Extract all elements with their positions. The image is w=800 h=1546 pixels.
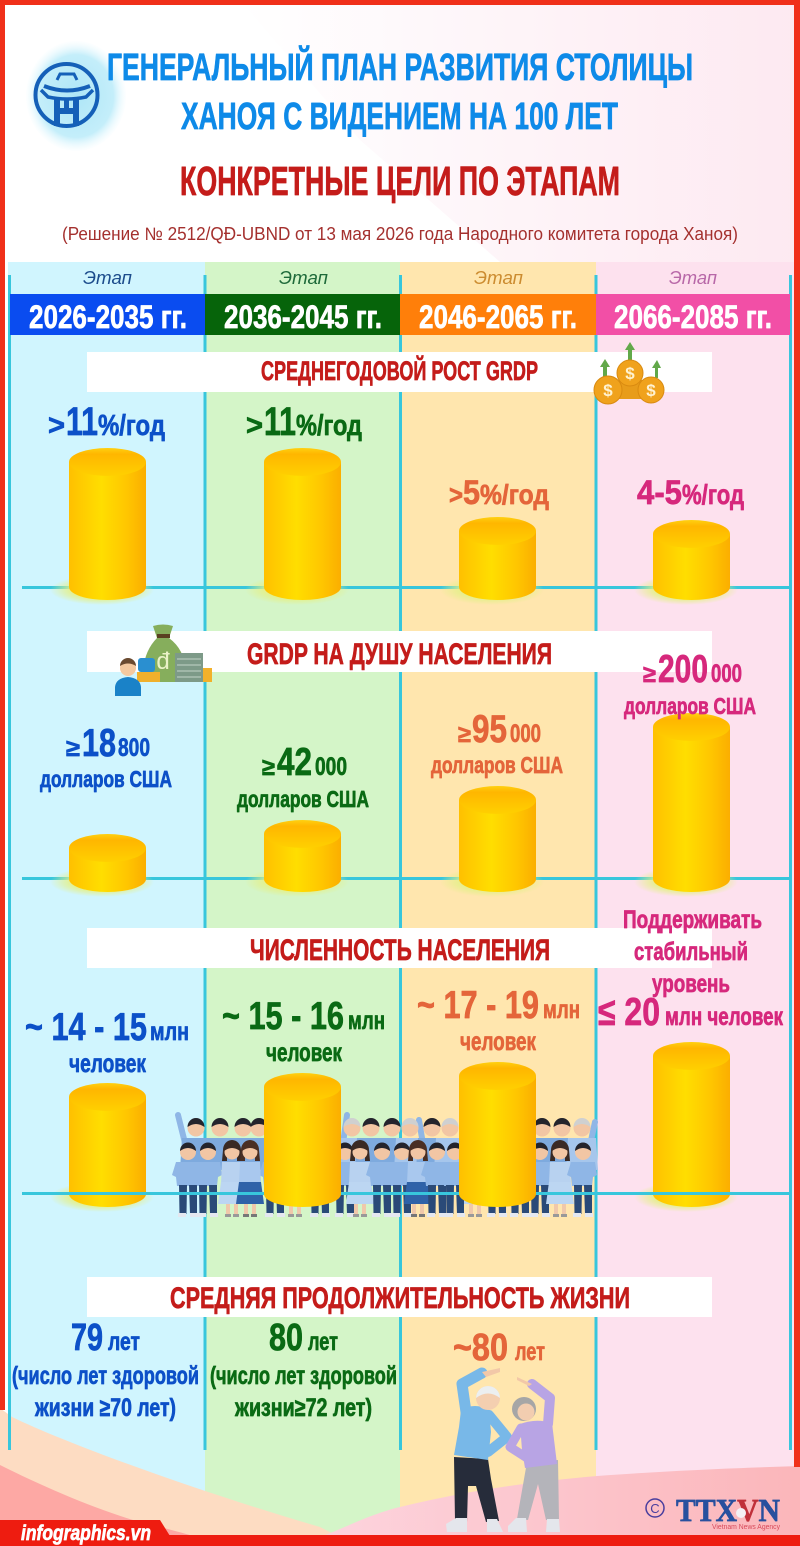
value: column 3 life expectancy: ~80 (453, 1327, 508, 1369)
value: column 1 life expectancy: жизни ≥70 лет) (34, 1394, 176, 1422)
value: column 4 per capita: 200 (658, 648, 708, 691)
value: column 2 life expectancy: лет (308, 1328, 338, 1356)
logo: TTXVN: C (650, 1501, 660, 1516)
grid line: population baseline (22, 1192, 790, 1195)
GRDP growth values (48, 400, 744, 512)
logo: TTXVN: TTXVN (676, 1492, 780, 1528)
value: column 1 per capita: 800 (118, 734, 150, 762)
stage year bars: 2026-2035 гг. (29, 299, 187, 335)
value: column 1 per capita: ≥ (66, 735, 80, 762)
section: population heading: ЧИСЛЕННОСТЬ НАСЕЛЕНИЯ (250, 934, 550, 967)
value: column 3 growth: 5 (463, 474, 480, 512)
stage year bars (10, 294, 790, 335)
section: population heading (87, 928, 712, 968)
value: column 4 growth: %/год (682, 479, 744, 510)
chart: GRDP per capita cylinders (50, 713, 738, 897)
value: column 2 per capita: 42 (277, 741, 312, 784)
value: column 2 population (222, 995, 385, 1067)
value: column 4 population (598, 906, 783, 1034)
value: column 4 population: стабильный (634, 938, 748, 966)
footer waves (0, 1408, 800, 1546)
stage year bars: 2046-2065 гг. (419, 299, 577, 335)
value: column 2 growth: 11 (264, 400, 296, 444)
title: ХАНОЯ С ВИДЕНИЕМ НА 100 ЛЕТ (181, 96, 618, 138)
value: column 1 population (25, 1006, 189, 1078)
decision reference: (Решение № 2512/QĐ-UBND от 13 мая 2026 года Народного комитета города Ханоя) (62, 224, 738, 244)
stage labels: Этап (83, 268, 132, 288)
value: column 4 growth (637, 474, 744, 512)
section: life expectancy heading (87, 1277, 712, 1317)
life expectancy values (12, 1317, 545, 1422)
value: column 4 per capita (624, 648, 756, 719)
man (446, 1368, 507, 1532)
value: column 4 population: уровень (652, 970, 730, 998)
chart: GRDP growth cylinders (50, 448, 738, 605)
value: column 2 population: человек (266, 1037, 343, 1067)
value: column 3 per capita: 000 (510, 720, 541, 748)
value: column 1 growth (48, 400, 165, 444)
icon: coins with arrows (594, 342, 664, 404)
value: column 3 growth (449, 474, 549, 512)
stage labels: Этап (474, 268, 523, 288)
value: column 1 per capita: 18 (82, 722, 116, 765)
section: GRDP per capita heading (87, 631, 712, 672)
value: column 3 population: млн (543, 996, 580, 1024)
value: column 3 per capita: 95 (472, 708, 507, 751)
value: column 3 population (417, 984, 580, 1056)
value: column 2 per capita (237, 741, 369, 812)
icon: coins with arrows: $ (625, 364, 635, 383)
value: column 4 per capita: ≥ (643, 661, 656, 688)
stage labels: Этап (279, 268, 328, 288)
value: column 3 per capita (431, 708, 563, 778)
value: column 2 growth: %/год (296, 410, 362, 442)
value: column 1 per capita (40, 722, 172, 792)
icon: coins with arrows: $ (603, 381, 613, 400)
value: column 1 growth: > (48, 409, 65, 442)
value: column 3 growth: > (449, 480, 463, 510)
value: column 1 population: ~ 14 - 15 (25, 1006, 147, 1049)
icon: money bag and advisor: đ (156, 648, 170, 675)
value: column 1 per capita: долларов США (40, 766, 172, 792)
value: column 1 growth: 11 (66, 400, 98, 444)
section: life expectancy heading: СРЕДНЯЯ ПРОДОЛЖИТЕЛЬНОСТЬ ЖИЗНИ (170, 1282, 630, 1315)
value: column 2 per capita: ≥ (262, 754, 275, 781)
title (107, 44, 693, 138)
woman (508, 1377, 560, 1532)
value: column 3 life expectancy: лет (515, 1338, 545, 1366)
value: column 2 growth: > (246, 409, 263, 442)
value: column 1 life expectancy: (число лет здоровой (12, 1362, 199, 1390)
value: column 2 population: ~ 15 - 16 (222, 995, 344, 1038)
illustration: elderly couple exercising (446, 1368, 560, 1532)
chart: population cylinder columns 2 and 3 (264, 1062, 536, 1207)
footer banner: infographics.vn: infographics.vn (21, 1522, 151, 1545)
value: column 1 population: человек (69, 1048, 147, 1078)
value: column 1 life expectancy: 79 (71, 1317, 103, 1359)
section: GRDP growth heading (87, 352, 712, 392)
value: column 4 per capita: 000 (711, 660, 742, 688)
section: GRDP growth heading: СРЕДНЕГОДОВОЙ РОСТ GRDP (261, 355, 538, 386)
value: column 2 life expectancy: (число лет здоровой (210, 1362, 397, 1390)
value: column 1 life expectancy: лет (108, 1328, 140, 1356)
value: column 1 population: млн (150, 1018, 189, 1046)
value: column 4 population: ≤ 20 (598, 991, 660, 1034)
value: column 2 life expectancy: жизни≥72 лет) (234, 1394, 372, 1422)
illustration: crowd of people (172, 1115, 598, 1217)
section: GRDP per capita heading: GRDP НА ДУШУ НАСЕЛЕНИЯ (247, 638, 552, 671)
value: column 3 growth: %/год (480, 479, 549, 510)
value: column 1 growth: %/год (98, 410, 165, 442)
value: column 4 growth: 4-5 (637, 474, 682, 512)
logo: TTXVN: Vietnam News Agency (712, 1524, 780, 1531)
value: column 2 life expectancy (210, 1317, 397, 1422)
value: column 2 life expectancy: 80 (269, 1317, 303, 1359)
stage year bars: 2036-2045 гг. (224, 299, 382, 335)
stage labels (83, 268, 717, 288)
value: column 4 per capita: долларов США (624, 693, 756, 719)
value: column 2 per capita: долларов США (237, 786, 369, 812)
chart: population cylinder columns 1 and 4 (50, 1042, 738, 1212)
GRDP per capita values (40, 648, 756, 812)
value: column 2 per capita: 000 (315, 753, 347, 781)
value: column 3 per capita: ≥ (458, 721, 471, 748)
stage labels: Этап (669, 268, 717, 288)
value: column 3 per capita: долларов США (431, 752, 563, 778)
grid lines (8, 275, 792, 1450)
value: column 1 life expectancy (12, 1317, 199, 1422)
population values (25, 906, 783, 1078)
icon: coins with arrows: $ (646, 381, 656, 400)
value: column 3 population: человек (460, 1026, 537, 1056)
icon: money bag and advisor (115, 624, 212, 696)
value: column 3 population: ~ 17 - 19 (417, 984, 539, 1027)
logo: Hanoi emblem (26, 41, 126, 151)
value: column 2 population: млн (348, 1007, 385, 1035)
value: column 2 growth (246, 400, 362, 444)
